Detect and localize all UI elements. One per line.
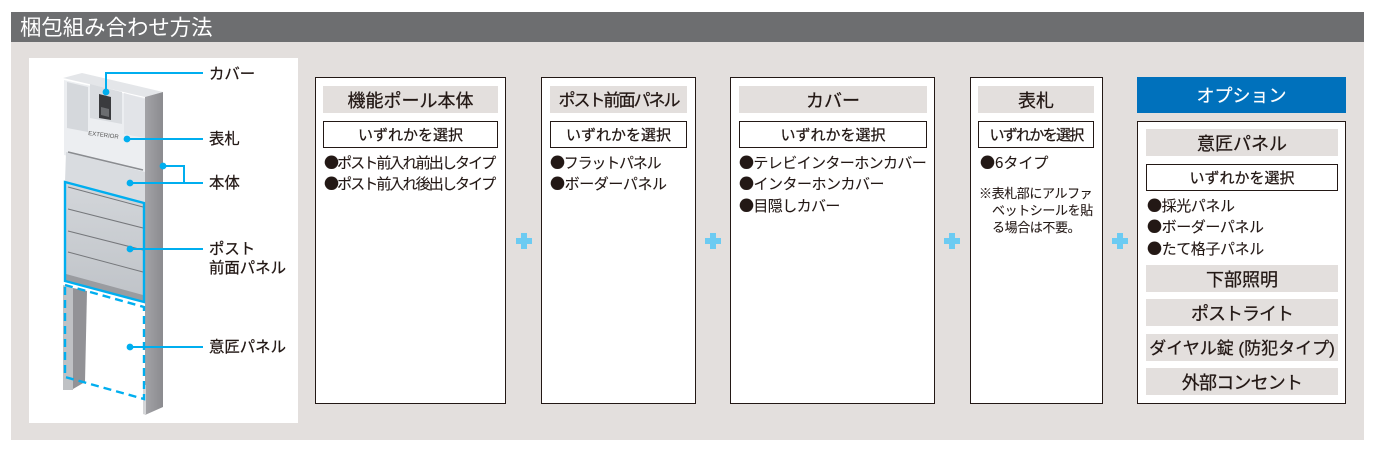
panel: post front panel: [541, 77, 696, 404]
selector: いずれかを選択: [1189, 170, 1294, 187]
post side face: [145, 92, 163, 415]
plus icon: [516, 233, 532, 249]
plus icon: [944, 233, 960, 249]
selector: いずれかを選択: [358, 127, 463, 144]
heading: 機能ポール本体: [348, 91, 474, 111]
note: る場合は不要。: [992, 217, 1080, 236]
list item: ●6タイプ: [980, 152, 1048, 173]
option: external outlet: 外部コンセント: [1182, 373, 1302, 393]
plus icon: [1112, 233, 1128, 249]
option: lower lighting: 下部照明: [1206, 270, 1278, 290]
selector: [739, 121, 927, 148]
selector: [1146, 164, 1338, 191]
panel: options: [1137, 121, 1346, 404]
selector: [550, 121, 687, 148]
option: post light: ポストライト: [1191, 304, 1293, 324]
selector: いずれかを選択: [989, 127, 1083, 144]
left leg: [63, 285, 73, 390]
label: nameplate: 表札: [209, 131, 240, 148]
selector: いずれかを選択: [566, 127, 671, 144]
illustration: post diagram: [63, 72, 203, 415]
heading: [550, 86, 687, 113]
heading: [978, 86, 1094, 113]
label: post front panel: ポスト: [209, 241, 255, 258]
list item: ●フラットパネル: [550, 152, 660, 173]
upper face: [64, 80, 145, 175]
leader lines: [106, 73, 203, 347]
label: post front panel: 前面パネル: [209, 260, 286, 277]
plus icon: [705, 233, 721, 249]
option heading: オプション: [1196, 86, 1286, 106]
label: post front panel: [209, 240, 286, 277]
option: dial lock: [1146, 334, 1338, 361]
list item: ●目隠しカバー: [739, 195, 840, 216]
option: post light: [1146, 299, 1338, 326]
heading: ポスト前面パネル: [558, 91, 678, 110]
label: design panel: 意匠パネル: [209, 339, 286, 356]
heading: 表札: [1018, 91, 1054, 111]
note: [979, 183, 1093, 236]
intercom: [99, 94, 111, 120]
option heading: [1137, 77, 1346, 113]
selector: [978, 121, 1094, 148]
list item: ●ポスト前入れ前出しタイプ: [324, 152, 494, 173]
heading: [323, 86, 498, 113]
solid outline: [65, 182, 144, 302]
option: dial lock: ダイヤル錠 (防犯タイプ): [1149, 339, 1335, 358]
list item: ●テレビインターホンカバー: [739, 152, 926, 173]
note: ベットシールを貼: [992, 200, 1093, 219]
option: lower lighting: [1146, 265, 1338, 292]
panel: main pole: [315, 77, 506, 404]
list item: ●ボーダーパネル: [1147, 216, 1264, 237]
panel: cover: [730, 77, 935, 404]
list item: ●ボーダーパネル: [550, 173, 667, 194]
selector: いずれかを選択: [780, 127, 886, 144]
heading: design panel: [1146, 129, 1338, 156]
heading: design panel: 意匠パネル: [1197, 134, 1287, 154]
panel: nameplate: [970, 77, 1103, 404]
EXTERIOR lettering: EXTERIOR: [88, 131, 120, 141]
body panel: [65, 152, 145, 205]
selector: [323, 121, 498, 148]
heading: [739, 86, 927, 113]
list item: ●たて格子パネル: [1147, 238, 1264, 259]
note: ※表札部にアルファ: [979, 183, 1092, 202]
label: body: 本体: [209, 175, 240, 192]
label: cover: カバー: [209, 66, 255, 83]
post top: [63, 73, 163, 97]
list item: ●ポスト前入れ後出しタイプ: [324, 173, 494, 194]
heading: カバー: [806, 91, 860, 111]
list item: ●インターホンカバー: [739, 173, 884, 194]
post front panel: [65, 182, 144, 302]
dashed outline: [65, 285, 144, 399]
panel: product illustration: [29, 58, 298, 423]
list item: ●採光パネル: [1147, 195, 1235, 216]
option: external outlet: [1146, 368, 1338, 395]
title bar: 梱包組み合わせ方法: [20, 16, 213, 40]
title bar: [11, 12, 1364, 42]
